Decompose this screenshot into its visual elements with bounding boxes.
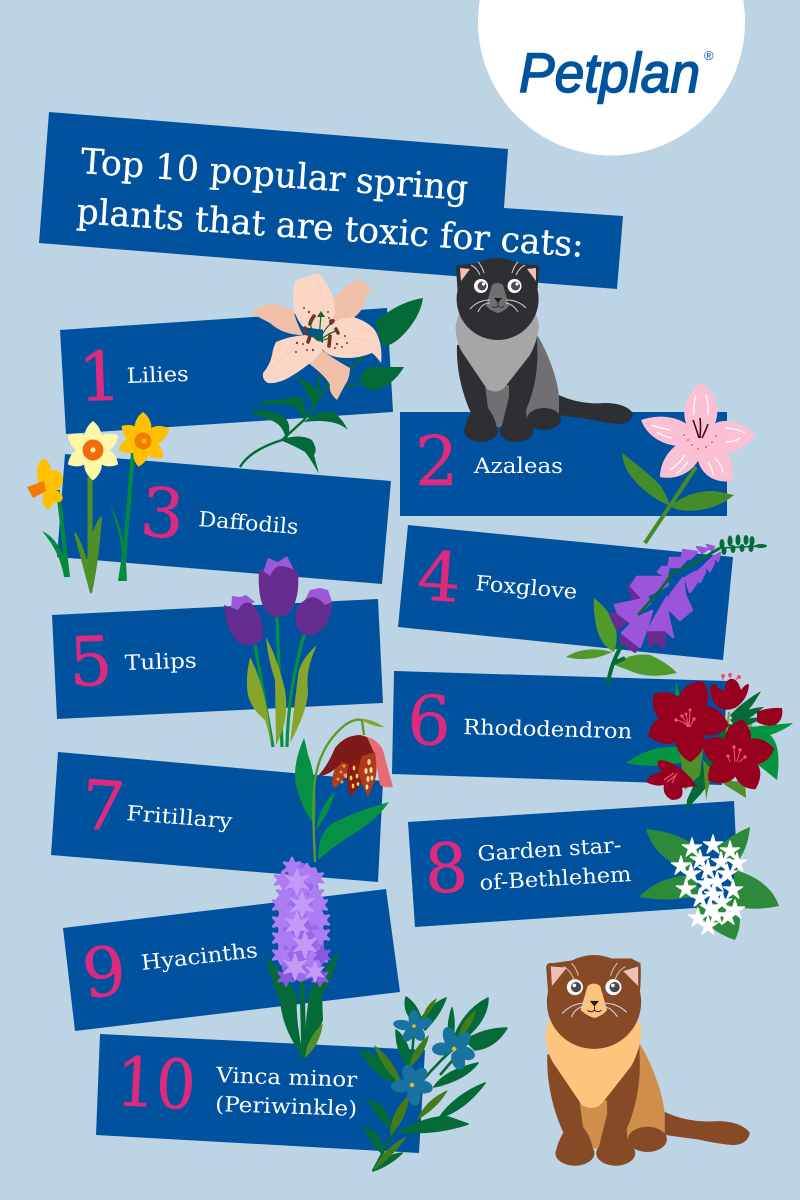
panel 10: Vinca minor [96,1034,425,1153]
logo: Petplan: ® [704,48,714,63]
panel 5: Tulips: Tulips [124,648,197,675]
panel 10: Vinca minor: (Periwinkle) [215,1092,358,1121]
panel 4: Foxglove: Foxglove [475,571,578,604]
panel 2: Azaleas [400,412,727,516]
panel 10: Vinca minor: 10 [114,1043,198,1126]
icon: rhododendron [626,673,793,810]
icon: lily flower [240,273,423,474]
icon: tulips [224,556,332,747]
panel 8: Garden star-of-Bethlehem: 8 [423,829,470,910]
panel 4: Foxglove [398,525,733,660]
panel 5: Tulips [52,599,383,719]
icon: gray cat [456,258,633,442]
panel 7: Fritillary [51,752,383,882]
panel 6: Rhododendron: 6 [407,682,451,762]
icon: foxglove [566,534,767,685]
icon: vinca minor [360,997,507,1171]
panel 3: Daffodils: Daffodils [198,507,299,539]
title banner: Top 10 popular spring [79,142,469,209]
icon: fritillary [295,719,393,862]
panel 5: Tulips: 5 [68,623,114,703]
logo: Petplan: Petplan [519,41,700,104]
panel 8: Garden star-of-Bethlehem: Garden star- [477,833,622,866]
icon: hyacinth [266,858,339,1058]
panel 7: Fritillary: Fritillary [126,801,233,833]
logo: Petplan [478,0,745,156]
icon: daffodils [27,412,173,593]
icon: brown cat [546,955,750,1166]
panel 9: Hyacinths: 9 [79,932,130,1015]
panel 1: Lilies: 1 [77,338,123,418]
panel 8: Garden star-of-Bethlehem: of-Bethlehem [479,862,632,895]
panel 1: Lilies: Lilies [126,362,189,388]
title banner: plants that are toxic for cats: [75,192,585,266]
panel 1: Lilies [60,308,393,434]
panel 10: Vinca minor: Vinca minor [215,1063,359,1092]
panel 4: Foxglove: 4 [415,537,463,619]
panel 3: Daffodils [57,454,391,584]
panel 6: Rhododendron: Rhododendron [463,715,632,743]
panel 9: Hyacinths [63,889,400,1031]
panel 9: Hyacinths: Hyacinths [140,938,259,975]
icon: azalea flower [622,382,755,543]
panel 2: Azaleas: 2 [415,423,458,502]
panel 2: Azaleas: Azaleas [473,454,563,478]
panel 8: Garden star-of-Bethlehem [408,801,739,927]
icon: star-of-Bethlehem [639,827,779,940]
panel 6: Rhododendron [392,671,727,785]
panel 3: Daffodils: 3 [138,473,187,555]
panel 7: Fritillary: 7 [79,766,127,848]
title banner [39,112,623,289]
